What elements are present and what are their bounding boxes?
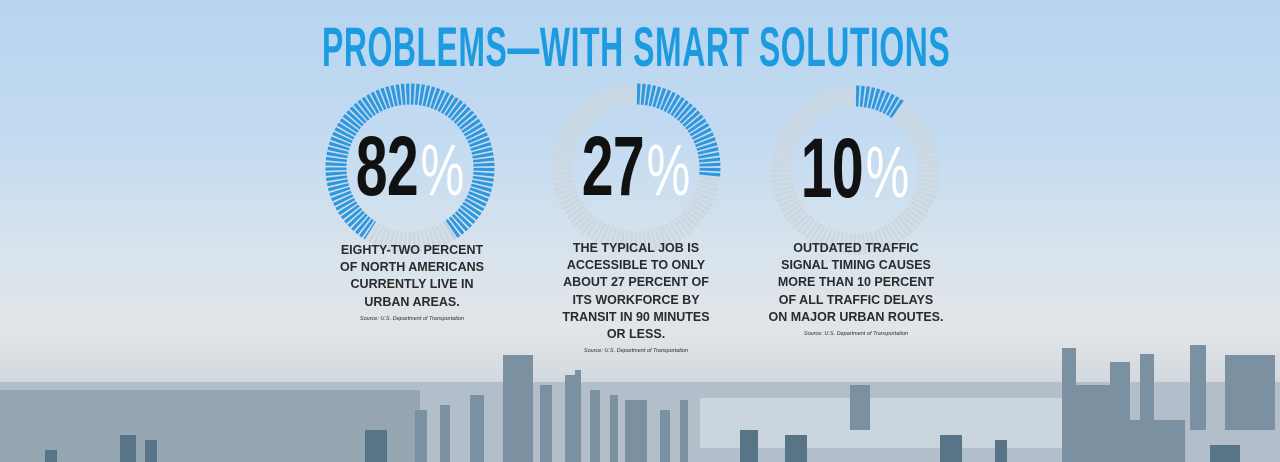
text: 27%: TRANSIT IN 90 MINUTES: [562, 310, 710, 324]
text: 82%: [340, 243, 484, 322]
text: 27%: [562, 241, 710, 354]
text: 10%: SIGNAL TIMING CAUSES: [781, 258, 931, 272]
text: 10%: OUTDATED TRAFFIC: [793, 241, 919, 255]
text: 82%: OF NORTH AMERICANS: [340, 260, 484, 274]
title: PROBLEMS—WITH SMART SOLUTIONS: [322, 15, 950, 78]
text: 10%: MORE THAN 10 PERCENT: [778, 275, 934, 289]
text: 82%: URBAN AREAS.: [364, 295, 460, 309]
gauge: 27%: 27%: [582, 119, 690, 213]
gauge: 27%: [552, 84, 720, 252]
text: 10%: ON MAJOR URBAN ROUTES.: [768, 310, 944, 324]
text: 10%: [768, 241, 944, 337]
text: 27%: ACCESSIBLE TO ONLY: [567, 258, 705, 272]
text: 10%: Source: U.S. Department of Transportation: [804, 331, 908, 337]
gauge: 10%: 10%: [801, 121, 909, 215]
gauge: 82%: 82%: [356, 119, 464, 213]
text: 27%: THE TYPICAL JOB IS: [573, 241, 699, 255]
city skyline: [0, 345, 1280, 462]
gauge: 10%: [770, 86, 940, 254]
text: 27%: ITS WORKFORCE BY: [572, 293, 700, 307]
text: 27%: Source: U.S. Department of Transportation: [584, 348, 688, 354]
text: 27%: OR LESS.: [607, 327, 665, 341]
text: 10%: OF ALL TRAFFIC DELAYS: [779, 293, 933, 307]
gauge: 82%: [326, 84, 494, 252]
text: 82%: EIGHTY-TWO PERCENT: [341, 243, 483, 257]
text: 82%: CURRENTLY LIVE IN: [351, 277, 473, 291]
text: 82%: Source: U.S. Department of Transportation: [360, 316, 464, 322]
text: 27%: ABOUT 27 PERCENT OF: [563, 275, 709, 289]
